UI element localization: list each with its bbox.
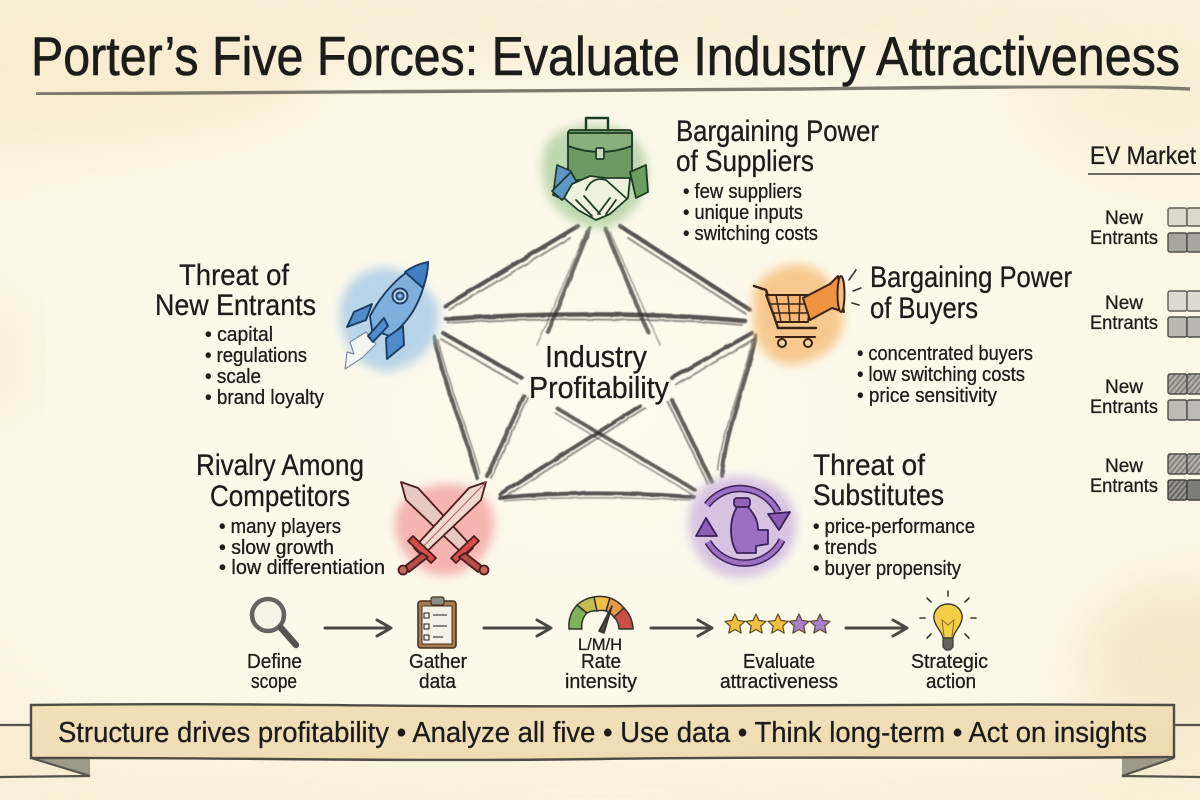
arrow [484,620,551,636]
center label: industry profitability: Industry [545,339,647,374]
panel: rivalry among competitors [196,449,494,579]
center label: industry profitability [529,339,669,405]
step: rate intensity: Rate [581,651,621,673]
center label: industry profitability: Profitability [529,370,669,405]
arrow [651,620,712,636]
icon: briefcase and handshake [542,118,648,228]
heading [870,261,1072,325]
panel: threat of new entrants [155,259,439,409]
heading: New Entrants [155,289,316,322]
bullet list: • price sensitivity [857,385,997,407]
bullet list: • unique inputs [683,202,803,224]
heading [196,449,364,513]
arrow [846,620,907,636]
step: strategic action [911,591,988,693]
pentagon connector lines [434,226,756,501]
row 3: Entrants [1090,397,1158,418]
bullet list: • low switching costs [857,364,1025,386]
heading: Threat of [813,449,926,482]
icon: rocket [339,262,439,372]
banner text: Structure drives profitability • Analyze all five • Use data • Think long-term • Act on insights [58,717,1147,749]
step: gather data: data [419,671,457,693]
heading: of Buyers [870,292,978,325]
bullet list [813,516,975,580]
row 1: New [1105,208,1143,229]
heading: Bargaining Power [870,261,1072,294]
bullet list: • brand loyalty [205,387,324,409]
bullet list: • buyer propensity [813,558,961,580]
bullet list: • scale [205,366,261,388]
step: rate intensity: L/M/H [578,635,622,654]
banner ribbon with key takeaways [0,704,1200,777]
bullet list: • concentrated buyers [857,343,1033,365]
title underline [36,87,1190,94]
bullet list [205,324,324,409]
step: define scope [247,599,302,693]
bullet list: • regulations [205,345,307,367]
step: strategic action: action [926,671,976,693]
bullet list: • few suppliers [683,181,802,203]
row 2: New [1105,293,1143,314]
bullet list [683,181,818,245]
step: strategic action: Strategic [911,651,988,673]
panel: bargaining power of buyers [753,261,1072,407]
row 2 [1090,291,1200,337]
bullet list: • capital [205,324,273,346]
row 2: Entrants [1090,313,1158,334]
step: evaluate attractiveness: attractiveness [720,671,838,693]
step: define scope: scope [251,671,297,693]
process flow [247,591,988,693]
step: gather data [409,597,467,693]
step: gather data: Gather [409,651,467,673]
row 3 [1090,374,1200,420]
heading [813,449,944,512]
heading: Substitutes [813,479,944,512]
heading: Threat of [179,259,290,292]
step: rate intensity [565,596,637,693]
row 1 [1090,208,1200,252]
bullet list: • switching costs [683,223,818,245]
row 4: Entrants [1090,476,1158,497]
row 1: Entrants [1090,228,1158,249]
bullet list [219,516,385,579]
icon: crossed swords [395,482,494,576]
heading [155,259,316,322]
row 4: New [1105,456,1143,477]
arrow [325,620,391,636]
row 3: New [1105,377,1143,398]
step: evaluate attractiveness [720,614,838,693]
heading: Rivalry Among [196,449,364,482]
row 4 [1090,454,1200,500]
panel: bargaining power of suppliers [542,115,879,245]
heading: Bargaining Power [676,115,879,148]
icon: shopping cart and megaphone [753,264,861,365]
heading: of Suppliers [676,145,814,178]
bullet list: • trends [813,537,877,559]
icon: substitution cycle with bottle [689,476,796,578]
step: rate intensity: intensity [565,671,637,693]
step: evaluate attractiveness: Evaluate [743,651,815,673]
bullet list: • slow growth [219,537,334,559]
heading [676,115,879,178]
bullet list [857,343,1033,407]
step: define scope: Define [247,651,302,673]
bullet list: • many players [219,516,341,538]
panel: threat of substitutes [689,449,975,580]
panel: EV market [1088,142,1200,500]
bullet list: • price-performance [813,516,975,538]
heading: Competitors [210,480,350,513]
bullet list: • low differentiation [219,557,385,579]
